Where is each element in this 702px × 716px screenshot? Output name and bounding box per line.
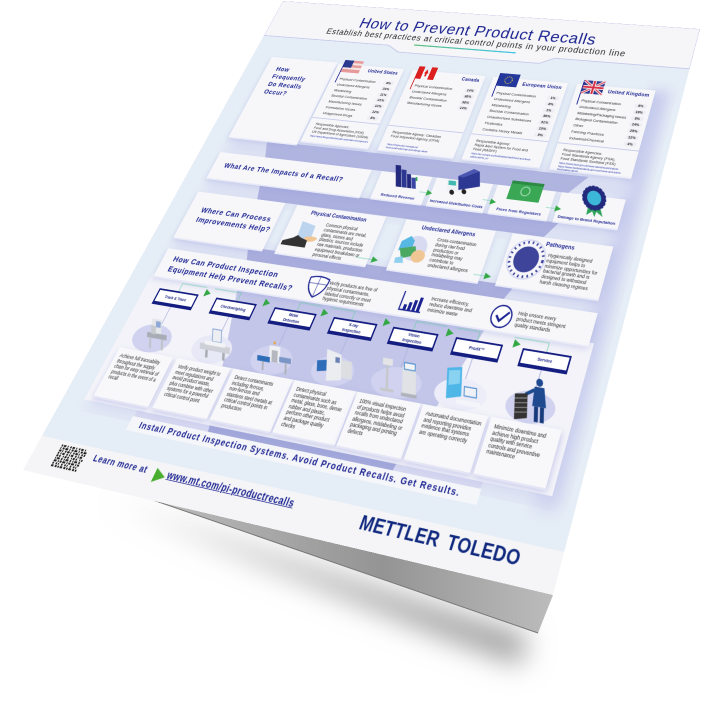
panel: physical contamination xyxy=(275,205,386,266)
panel: Canada: Physical Contamination xyxy=(414,84,453,91)
text: vision inspection: defects xyxy=(347,427,364,437)
title: How to Prevent Product Recalls xyxy=(357,15,599,48)
panel: Canada: 36% xyxy=(461,100,470,105)
text: x-ray inspection: perform other product xyxy=(285,409,330,423)
panel: European Union: 19% xyxy=(538,126,547,131)
panel: European Union xyxy=(462,77,568,167)
panel: Canada: Canada xyxy=(461,77,480,83)
panel: United Kingdom: United Kingdom xyxy=(607,89,650,98)
panel: pathogens: minimize opportunities for xyxy=(544,263,598,276)
text: vision inspection xyxy=(336,392,421,459)
text: track and trace: recall xyxy=(107,374,120,381)
panel: United Kingdom: Responsible Agencies: xyxy=(563,148,603,156)
panel: European Union: Physical Contamination xyxy=(496,91,537,98)
panel: how frequently heading xyxy=(229,57,338,144)
flag: Canada xyxy=(410,66,438,90)
panel: European Union: Pesticides xyxy=(484,121,503,127)
panel: pathogens: designed to withstand xyxy=(541,274,587,285)
panel: United Kingdom: 19% xyxy=(635,110,643,114)
stage sign: Vision Inspection: Inspection xyxy=(402,337,422,345)
text: ProdX: Automated documentation xyxy=(425,410,483,427)
panel: United States: Unapproved Drugs xyxy=(322,111,353,118)
text: checkweighing: Verify product weight to xyxy=(177,363,222,377)
text: metal detection: production xyxy=(220,402,243,412)
panel: pathogens: Pathogens xyxy=(545,241,576,251)
panel: pathogens: bacterial growth and is xyxy=(542,268,590,280)
panel: United Kingdom: 12% xyxy=(627,135,636,140)
panel: reduced revenue xyxy=(370,171,432,204)
text: vision inspection: packaging and printing xyxy=(349,421,398,437)
text: track and trace: Achieve full traceability xyxy=(119,352,161,366)
benefit text 2: Increase efficiency, xyxy=(431,296,470,307)
panel: European Union: Undeclared Allergens xyxy=(493,97,531,104)
banner: call to action: Install Product Inspection Systems. Avoid Product Recalls. Get Results. xyxy=(137,420,462,499)
panel: how frequently heading: Occur? xyxy=(262,89,288,97)
text: track and trace xyxy=(94,347,173,407)
stage sign: Vision Inspection: Vision xyxy=(407,332,421,339)
panel: distribution costs xyxy=(426,178,493,212)
panel: United Kingdom: https://www.foodstandards.gov.scot/news-and-alerts xyxy=(558,165,621,175)
stage sign: ProdX: ProdX™ xyxy=(468,345,486,353)
icon: quality check xyxy=(490,304,513,328)
flag: European Union xyxy=(491,73,521,97)
panel: United Kingdom: 8% xyxy=(638,104,644,108)
stage sign: Checkweighing: Checkweighing xyxy=(220,303,247,312)
icon: productivity chart xyxy=(398,290,424,314)
panel: Canada: Undeclared Allergens xyxy=(411,89,447,96)
panel: process improvements heading: Improvements Help? xyxy=(194,215,272,234)
panel: undeclared allergens xyxy=(386,219,496,282)
panel: undeclared allergens: mislabeling may xyxy=(431,252,463,262)
panel: United States: Biocidal Contamination xyxy=(331,94,368,101)
text: service: Minimize downtime and xyxy=(493,423,547,439)
panel: impacts heading xyxy=(207,152,372,197)
machine: vision xyxy=(380,358,417,399)
panel: United Kingdom: 4% xyxy=(627,142,633,146)
machine: service technician xyxy=(514,378,546,424)
heading: How Can Product Inspection xyxy=(171,255,280,279)
panel: European Union: Biocidal Contamination xyxy=(489,109,530,116)
panel: United States: 11% xyxy=(379,92,387,97)
panel: United Kingdom: 24% xyxy=(631,122,640,127)
panel: European Union: 5% xyxy=(537,133,544,137)
text: metal detection: stainless steel metals at xyxy=(226,391,273,406)
panel: European Union: https://ec.europa.eu/food/safety/rasff-food-and-feed- xyxy=(471,152,531,162)
text: metal detection xyxy=(210,369,293,432)
text: x-ray inspection: contaminants such as xyxy=(293,391,338,406)
logo: Mettler Toledo: METTLER TOLEDO xyxy=(356,511,523,571)
stage sign: Track and Trace: Track & Trace xyxy=(164,294,187,302)
panel: United Kingdom: 8% xyxy=(634,116,641,121)
stage sign: Metal Detection: Detection xyxy=(282,317,300,324)
text: service: quality with service xyxy=(489,435,533,450)
panel: pathogens: equipment helps to xyxy=(546,258,586,268)
panel: United States: United States xyxy=(367,69,399,76)
panel: European Union: Contains Heavy Metals xyxy=(482,127,523,135)
text: metal detection: non-ferrous and xyxy=(228,385,261,397)
panel: Canada: food-recall-warnings-and-allergy-alerts xyxy=(385,146,428,153)
text: metal detection: critical control points in xyxy=(223,397,269,411)
panel: Canada: Food Inspection Agency (CFIA) xyxy=(390,134,440,143)
row connector bands xyxy=(125,141,589,493)
footer band xyxy=(23,436,564,595)
panel: Canada: 36% xyxy=(464,94,472,99)
panel: United Kingdom: Food Standards Agency (FSA), xyxy=(561,152,616,162)
panel: United Kingdom: Physical Contamination xyxy=(581,99,622,106)
panel: brand reputation xyxy=(553,192,626,229)
panel: undeclared allergens: during raw food xyxy=(435,242,466,251)
panel: European Union: Mislabeling xyxy=(491,103,512,108)
panel: physical contamination: Common physical xyxy=(325,222,359,232)
panel: fines: Fines from Regulators xyxy=(496,207,542,217)
header band xyxy=(261,1,700,75)
text: vision inspection: allergens, mislabeling or xyxy=(351,415,403,431)
icon: revenue bars xyxy=(395,164,418,189)
panel: European Union: Unauthorised Substances xyxy=(487,115,532,123)
text: metal detection: Detect contaminants xyxy=(233,374,274,387)
panel: Canada: https://inspection.canada.ca/ xyxy=(387,143,418,149)
panel: United Kingdom: https://www.food.gov.uk/news-alerts/search/alerts xyxy=(559,162,619,171)
panel: undeclared allergens: Undeclared Allergens xyxy=(421,225,476,238)
panel: Canada: Manufacturing Issues xyxy=(406,101,443,108)
panel: United States: Manufacturing Issues xyxy=(328,99,363,106)
text: vision inspection: 100% visual inspection xyxy=(358,398,407,413)
text: x-ray inspection: and package quality xyxy=(283,415,325,429)
panel: how frequently heading: Do Recalls xyxy=(267,81,303,90)
icon: arrow xyxy=(150,468,165,482)
panel: United States: 21% xyxy=(377,98,385,103)
panel: United States: Responsible Agencies: xyxy=(315,122,350,129)
panel: pathogens: harsh cleaning regimes xyxy=(539,279,589,291)
text: checkweighing: meet regulations and xyxy=(174,369,215,382)
subtitle underline xyxy=(414,44,516,54)
text: service: maintenance xyxy=(485,448,516,460)
text: vision inspection: of products helps avoid xyxy=(356,403,406,419)
panel: Canada: Biocidal Contamination xyxy=(409,95,448,102)
panel: United Kingdom: Food Standards Scotland (FSS) xyxy=(560,156,616,166)
text: service: controls and preventive xyxy=(487,442,541,458)
stage sign: Metal Detection xyxy=(267,307,317,331)
flag: United Kingdom xyxy=(576,79,606,104)
benefit text 1: physical contaminants, xyxy=(326,285,371,297)
panel: physical contamination: equipment breakdown or xyxy=(314,247,361,258)
stage sign: X-ray Inspection xyxy=(327,317,378,341)
panel: Canada: Responsible Agency: Canadian xyxy=(392,130,442,139)
panel: United Kingdom xyxy=(549,84,656,178)
panel: reduced revenue: Reduced Revenue xyxy=(380,192,415,201)
text: service xyxy=(473,417,562,488)
panel: European Union: 1% xyxy=(546,108,552,112)
stage sign: Vision Inspection xyxy=(387,327,439,352)
panel: United Kingdom: Undeclared Allergens xyxy=(579,105,616,112)
text: ProdX: evidence that systems xyxy=(420,422,470,438)
text: track and trace: chain for easy retrieval of xyxy=(113,363,160,377)
stage sign: X-ray Inspection: Inspection xyxy=(341,326,362,335)
panel: European Union: 1% xyxy=(550,96,556,100)
panel: undeclared allergens: production or xyxy=(433,247,459,256)
panel: United States xyxy=(301,63,404,148)
panel: United States: 12% xyxy=(374,104,382,108)
benefit text 2: reduce downtime and xyxy=(428,301,473,313)
panel: physical contamination: Physical Contamination xyxy=(310,210,368,223)
text: x-ray inspection xyxy=(272,380,356,445)
text: learn more: Learn more at xyxy=(91,453,150,476)
text: ProdX xyxy=(404,404,488,473)
panel: Canada xyxy=(378,70,486,158)
panel: European Union: Feed (RASFF) xyxy=(472,147,498,153)
benefit text 1: labeled correctly or meet xyxy=(324,290,372,303)
panel: impacts heading: What Are The Impacts of a Recall? xyxy=(222,162,345,184)
panel: United Kingdom: 25% xyxy=(629,129,638,134)
benefit text 3: quality standards xyxy=(514,321,551,333)
panel: physical contamination: plastics; sources include xyxy=(318,237,364,248)
machine: checkweigher xyxy=(200,328,230,361)
panel: United States: US Department of Agriculture (USDA) xyxy=(311,130,369,139)
machine: track and trace xyxy=(147,318,167,350)
icon: food safety shield xyxy=(308,276,331,298)
panel: undeclared allergens: Cross-contamination xyxy=(436,237,478,247)
text: checkweighing xyxy=(152,358,231,419)
panel: inspection equipment heading xyxy=(154,248,598,346)
panel: pathogens xyxy=(495,233,613,300)
machine: ProdX xyxy=(446,366,478,400)
panel: United Kingdom: Mislabeling/Packaging Issues xyxy=(577,111,627,119)
benefit text 3: product meets stringent xyxy=(516,316,567,329)
link: url: www.mt.com/pi-productrecalls xyxy=(165,470,296,510)
benefit text 1: Verify products are free of xyxy=(328,280,378,293)
icon: physical contamination xyxy=(280,221,318,248)
benefit text 3 xyxy=(514,310,567,333)
icon: rosette xyxy=(582,186,607,217)
text: service: achieve high product xyxy=(491,429,539,444)
panel: distribution costs: Increased Distribution Costs xyxy=(429,198,483,209)
panel: how frequently heading: How xyxy=(275,66,291,73)
panel: United States: Undeclared Allergens xyxy=(336,82,371,89)
text: x-ray inspection: checks xyxy=(280,421,296,430)
stage sign: Metal Detection: Metal xyxy=(288,312,299,318)
panel: United States: Food and Drug Association (FDA) xyxy=(313,126,365,135)
stage sign: Service: Service xyxy=(537,356,553,364)
text: checkweighing: plus combine with other xyxy=(169,380,214,394)
panel: fines xyxy=(488,185,556,220)
text: ProdX: are operating correctly xyxy=(418,428,468,444)
stage sign: ProdX xyxy=(450,337,503,363)
icon: allergens xyxy=(394,236,428,264)
panel: United States: 8% xyxy=(385,81,392,85)
panel: European Union: 8% xyxy=(548,102,554,106)
text: checkweighing: systems for a powerful xyxy=(166,385,210,399)
panel: physical contamination: raw materials, production xyxy=(316,242,363,253)
text: vision inspection: recalls from undeclared xyxy=(354,409,404,425)
icon: virus xyxy=(506,239,546,280)
panel: undeclared allergens: contribute to xyxy=(429,257,454,266)
panel: European Union: European Union xyxy=(521,82,563,90)
panel: United States: Physical Contamination xyxy=(339,77,377,84)
panel: how frequently heading: Frequently xyxy=(271,73,307,83)
benefit text 3: Help ensure every xyxy=(517,310,557,322)
stage sign: X-ray Inspection: X-ray xyxy=(348,322,359,328)
text: x-ray inspection: rubber and plastic, xyxy=(288,403,327,416)
benefit text 2 xyxy=(426,296,473,317)
text: ProdX: and reporting provides xyxy=(423,416,472,432)
panel: United Kingdom: food-safety-alerts xyxy=(557,168,578,173)
panel: physical contamination: personal effects xyxy=(312,252,342,261)
panel: process improvements heading: Where Can Process xyxy=(199,206,273,224)
machine: metal detector xyxy=(256,341,292,374)
panel: European Union: safety-alerts_en xyxy=(470,155,489,160)
panel: United Kingdom: Farming Practices xyxy=(571,129,605,137)
panel: European Union: 36% xyxy=(542,114,551,119)
stage sign: Track and Trace xyxy=(152,288,199,310)
panel: United States: https://www.fda.gov/food/recalls-outbreaks-emergencies xyxy=(309,135,368,144)
panel: process improvements heading xyxy=(174,192,285,250)
text: metal detection: including ferrous, xyxy=(231,380,266,392)
panel: pathogens: Hygienically designed xyxy=(547,252,593,264)
panel: Canada: 14% xyxy=(459,106,468,110)
text: x-ray inspection: Detect physical xyxy=(295,386,327,397)
text: track and trace: products in the event of a xyxy=(110,368,157,383)
benefit text 1 xyxy=(321,280,378,308)
flag: United States xyxy=(334,60,364,82)
text: checkweighing: avoid product waste, xyxy=(171,374,212,387)
QR code xyxy=(50,444,88,472)
stage sign: Checkweighing xyxy=(209,297,257,320)
heading: Equipment Help Prevent Recalls? xyxy=(166,265,294,293)
subtitle: Establish best practices at critical control points in your production line xyxy=(325,27,627,59)
machine: x-ray xyxy=(316,349,352,381)
panel: United Kingdom: Biological Contamination xyxy=(575,117,618,125)
panel: United Kingdom: Industrial/Chemical xyxy=(569,136,605,143)
icon: banknote xyxy=(506,180,545,203)
panel: Canada: 14% xyxy=(466,88,475,93)
panel: United States: Mislabeling xyxy=(333,88,352,93)
panel: European Union: 31% xyxy=(540,120,549,125)
panel: United States: 8% xyxy=(370,116,376,120)
icon: truck xyxy=(448,169,480,195)
benefit text 1: hygienic requirements xyxy=(321,296,365,308)
text: checkweighing: critical control point xyxy=(163,391,201,404)
panel: physical contamination: contaminants are metal, xyxy=(323,227,368,238)
panel: undeclared allergens: undeclared allergens xyxy=(427,262,469,273)
panel: United States: 12% xyxy=(371,110,380,114)
text: track and trace: throughout the supply xyxy=(116,358,156,371)
panel: United Kingdom: Other xyxy=(573,123,584,128)
text: x-ray inspection: metal, glass, bone, dense xyxy=(290,397,343,413)
panel: European Union: Rapid Alert System for Food and xyxy=(474,143,529,152)
panel: United States: Formulation Issues xyxy=(325,105,356,112)
panel: brand reputation: Damage to Brand Reputation xyxy=(557,214,616,226)
benefit text 2: minimize waste xyxy=(426,307,459,317)
panel: physical contamination: glass, stones and xyxy=(321,232,354,241)
panel: United States: 24% xyxy=(382,87,390,91)
panel: European Union: Responsible Agency: xyxy=(476,139,511,146)
stage sign: Service xyxy=(517,348,572,374)
